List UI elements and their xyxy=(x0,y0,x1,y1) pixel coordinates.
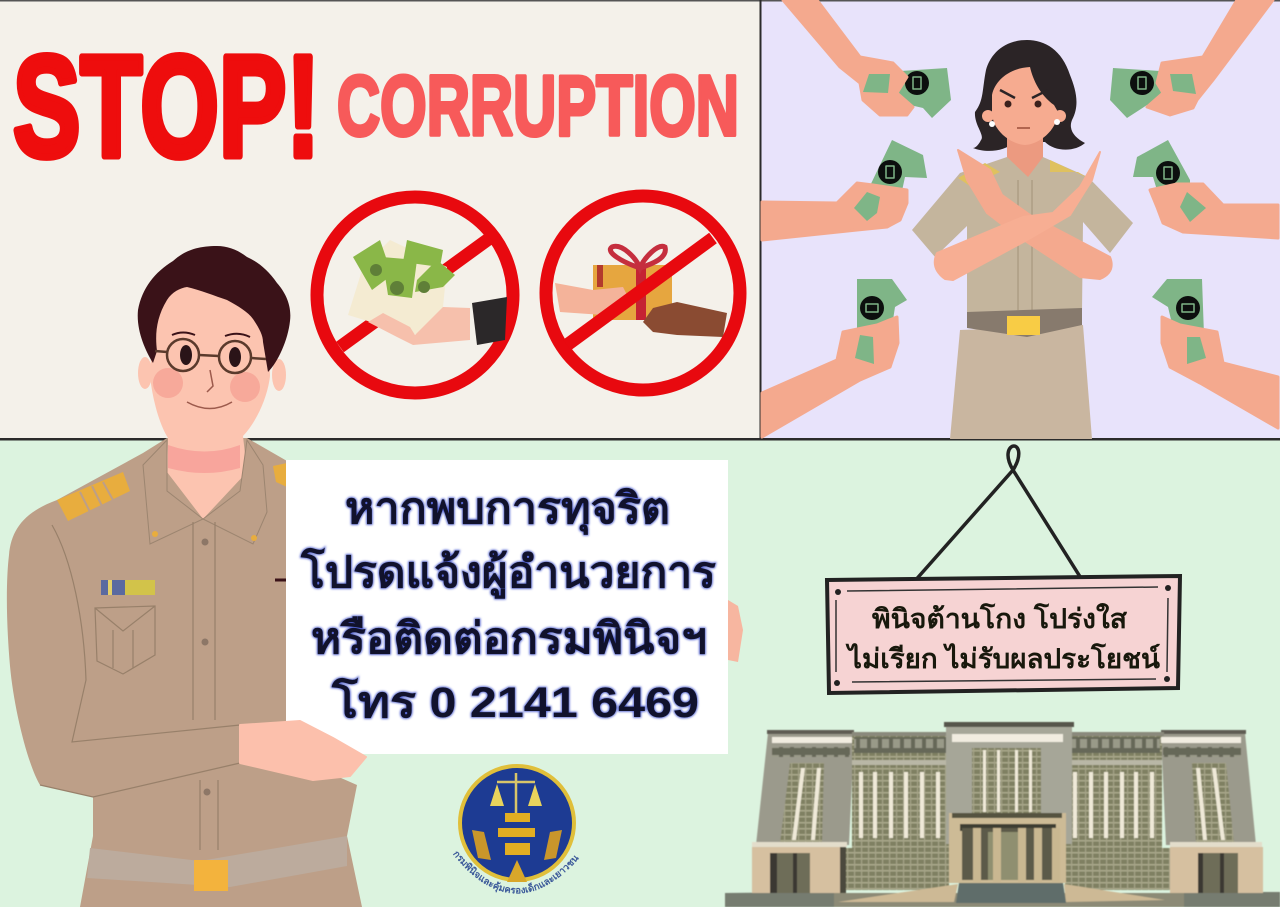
hand top right xyxy=(1110,0,1273,118)
title: CORRUPTION: CORRUPTION xyxy=(337,59,739,154)
figure: male official in uniform xyxy=(7,246,743,907)
icon: no gift xyxy=(546,196,740,390)
notice text: โทร 0 2141 6469 xyxy=(331,676,699,727)
hand bottom right xyxy=(1152,279,1278,428)
placket and buttons xyxy=(193,522,218,850)
stairs and ramps xyxy=(956,883,1066,903)
pocket xyxy=(95,606,155,674)
notice text: โปรดแจ้งผู้อำนวยการ xyxy=(300,546,716,599)
portico xyxy=(949,813,1066,883)
notice text: โปรดแจ้งผู้อำนวยการ xyxy=(300,546,716,599)
logo: department emblem xyxy=(453,764,579,894)
panel: top-left background xyxy=(0,0,760,439)
face xyxy=(992,67,1058,145)
shirt xyxy=(912,157,1133,316)
skirt xyxy=(950,325,1092,439)
notice text: หากพบการทุจริต xyxy=(345,485,670,536)
ledges xyxy=(752,842,847,847)
hand middle left xyxy=(762,140,927,240)
belt xyxy=(87,836,347,887)
notice text: หรือติดต่อกรมพินิจฯ xyxy=(311,615,707,663)
arm lines xyxy=(40,525,240,797)
panel: top-right background xyxy=(760,0,1280,439)
centre block xyxy=(946,724,1072,844)
ears xyxy=(138,357,152,389)
middle sections xyxy=(852,733,949,848)
hand top left xyxy=(783,0,951,118)
hand middle right xyxy=(1133,140,1278,238)
left epaulette xyxy=(57,472,130,521)
hair xyxy=(138,246,290,372)
epaulettes xyxy=(958,160,1088,186)
window bays xyxy=(780,763,824,843)
sign text xyxy=(845,602,1161,674)
right epaulette xyxy=(273,463,287,487)
base blocks xyxy=(752,847,843,893)
far hand xyxy=(728,600,743,662)
holding hand over the card xyxy=(240,721,366,780)
sign board xyxy=(827,576,1180,693)
hand bottom left xyxy=(762,279,907,437)
glasses xyxy=(167,339,199,371)
icon: no bribe money envelope xyxy=(317,197,513,393)
notice text xyxy=(300,485,716,727)
medal ribbon xyxy=(101,580,155,595)
panel: bottom background xyxy=(0,439,1280,907)
logo: department emblem: กรมพินิจและคุ้มครองเด็กและเยาวชน xyxy=(453,852,579,894)
sign text: ไม่เรียก ไม่รับผลประโยชน์ xyxy=(845,642,1161,674)
hanging sign xyxy=(827,446,1180,693)
title: STOP!: STOP! xyxy=(13,26,320,187)
notice text: หรือติดต่อกรมพินิจฯ xyxy=(311,615,707,663)
belt xyxy=(967,308,1082,337)
hair xyxy=(973,40,1085,151)
notice text: โทร 0 2141 6469 xyxy=(331,676,699,727)
hanging rope xyxy=(913,446,1084,583)
card: report corruption notice xyxy=(286,460,728,754)
figure: woman official refusing bribes xyxy=(912,40,1133,439)
face and neck xyxy=(150,285,270,519)
neck xyxy=(1007,135,1043,177)
neck shadow band xyxy=(168,445,240,473)
collar xyxy=(143,440,203,544)
torso and arm xyxy=(7,438,362,907)
building: department headquarters xyxy=(725,722,1280,907)
ground xyxy=(725,892,1280,907)
notice text: หากพบการทุจริต xyxy=(345,485,670,536)
sign text: พินิจต้านโกง โปร่งใส xyxy=(872,602,1128,634)
crossed arms xyxy=(958,150,1112,279)
wings xyxy=(756,733,854,845)
icon: bribing hands and money, top right panel xyxy=(762,0,1278,437)
